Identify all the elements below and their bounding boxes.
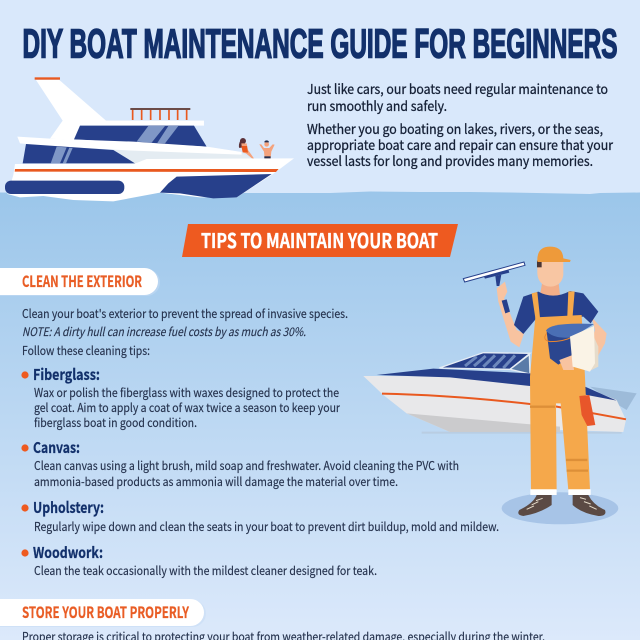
hand on bucket — [559, 355, 574, 370]
exterior intro text: NOTE: A dirty hull can increase fuel costs by as much as 30%. — [22, 323, 306, 340]
tip: canvas: Clean canvas using a light brush, mild soap and freshwater. Avoid cleaning the PVC with — [34, 457, 459, 474]
shoe laces — [527, 498, 597, 509]
intro paragraph 1 — [307, 79, 608, 115]
tip: fiberglass: fiberglass boat in good condition. — [34, 414, 197, 431]
tip: canvas: ammonia-based products as ammonia will damage the material over time. — [34, 473, 398, 490]
worker — [463, 247, 607, 516]
upper window glare thin — [157, 126, 178, 143]
tip: canvas — [21, 437, 459, 490]
tip: upholstery — [21, 497, 499, 535]
sea background — [0, 192, 640, 640]
raised arm — [497, 282, 524, 347]
illustration: yacht — [5, 77, 294, 201]
tip: upholstery: Regularly wipe down and clean the seats in your boat to prevent dirt buildup, mold and mildew. — [34, 518, 499, 535]
lower window glare — [51, 147, 67, 163]
boat shadow line — [422, 432, 622, 434]
tip: fiberglass — [21, 364, 340, 431]
intro paragraph 1: Just like cars, our boats need regular maintenance to — [307, 79, 608, 98]
upper window — [74, 126, 207, 147]
exterior intro text: Clean your boat's exterior to prevent the spread of invasive species. — [22, 305, 348, 322]
intro text — [307, 79, 614, 170]
squeegee — [463, 262, 525, 286]
intro paragraph 2: vessel lasts for long and provides many memories. — [307, 151, 593, 170]
banner: tips to maintain your boat: TIPS TO MAINTAIN YOUR BOAT — [201, 225, 438, 254]
hull stripe — [15, 169, 279, 172]
person: woman — [239, 138, 254, 158]
hair — [537, 261, 542, 267]
tip: woodwork: Clean the teak occasionally with the mildest cleaner designed for teak. — [34, 562, 377, 579]
neck — [540, 280, 560, 298]
tip: upholstery: Upholstery: — [33, 497, 104, 518]
red rag — [579, 395, 595, 426]
roof rail — [130, 108, 190, 120]
tip: woodwork: Woodwork: — [33, 542, 103, 563]
section heading: clean the exterior — [0, 268, 160, 296]
knee patches — [530, 407, 588, 471]
towel — [570, 326, 598, 372]
bucket handle — [545, 333, 572, 342]
illustration: speedboat — [363, 247, 637, 524]
cuffs — [530, 489, 591, 495]
navy strip — [377, 369, 617, 401]
engine cover — [590, 387, 637, 410]
person: man — [259, 140, 275, 158]
tip: canvas: Canvas: — [33, 437, 80, 458]
yacht hull — [7, 158, 294, 201]
tip: woodwork — [21, 542, 377, 579]
bucket — [547, 332, 572, 365]
hull navy pill — [5, 181, 124, 194]
shirt — [514, 291, 598, 334]
mid deck strip — [17, 137, 242, 155]
cap — [537, 247, 571, 262]
hull navy section — [160, 174, 272, 198]
upper window glare — [137, 126, 165, 143]
lower window — [23, 144, 135, 163]
overalls — [530, 315, 590, 490]
section heading: store your boat properly — [0, 599, 206, 627]
section heading: store your boat properly: STORE YOUR BOAT PROPERLY — [22, 601, 190, 623]
right arm — [562, 317, 607, 370]
intro paragraph 2: appropriate boat care and repair can ensure that your — [307, 135, 614, 154]
overalls straps — [532, 291, 575, 318]
bucket rim — [546, 324, 594, 338]
mast light — [35, 77, 60, 80]
hull shadow — [407, 413, 560, 432]
windshield — [439, 353, 530, 374]
exterior intro text: Follow these cleaning tips: — [22, 342, 150, 359]
wristband — [502, 299, 510, 313]
intro paragraph 2: Whether you go boating on lakes, rivers, or the seas, — [307, 119, 603, 138]
left shoe — [518, 495, 552, 516]
tip: fiberglass: gel coat. Aim to apply a coat of wax twice a season to keep your — [34, 399, 340, 416]
orange stripe — [382, 394, 626, 419]
tip: fiberglass: Fiberglass: — [33, 364, 100, 385]
intro paragraph 1: run smoothly and safely. — [307, 96, 447, 115]
face — [537, 262, 563, 287]
yacht mast arch — [36, 80, 204, 140]
worker shadow — [502, 492, 618, 524]
lower window glare thin — [63, 148, 73, 163]
lower deck shade — [113, 149, 253, 164]
tip: fiberglass: Wax or polish the fiberglass with waxes designed to protect the — [34, 384, 339, 401]
boat hull — [363, 376, 626, 432]
intro paragraph 2 — [307, 119, 614, 170]
section heading: clean the exterior: CLEAN THE EXTERIOR — [22, 270, 142, 292]
exterior intro text — [22, 305, 348, 359]
right shoe — [573, 495, 605, 516]
